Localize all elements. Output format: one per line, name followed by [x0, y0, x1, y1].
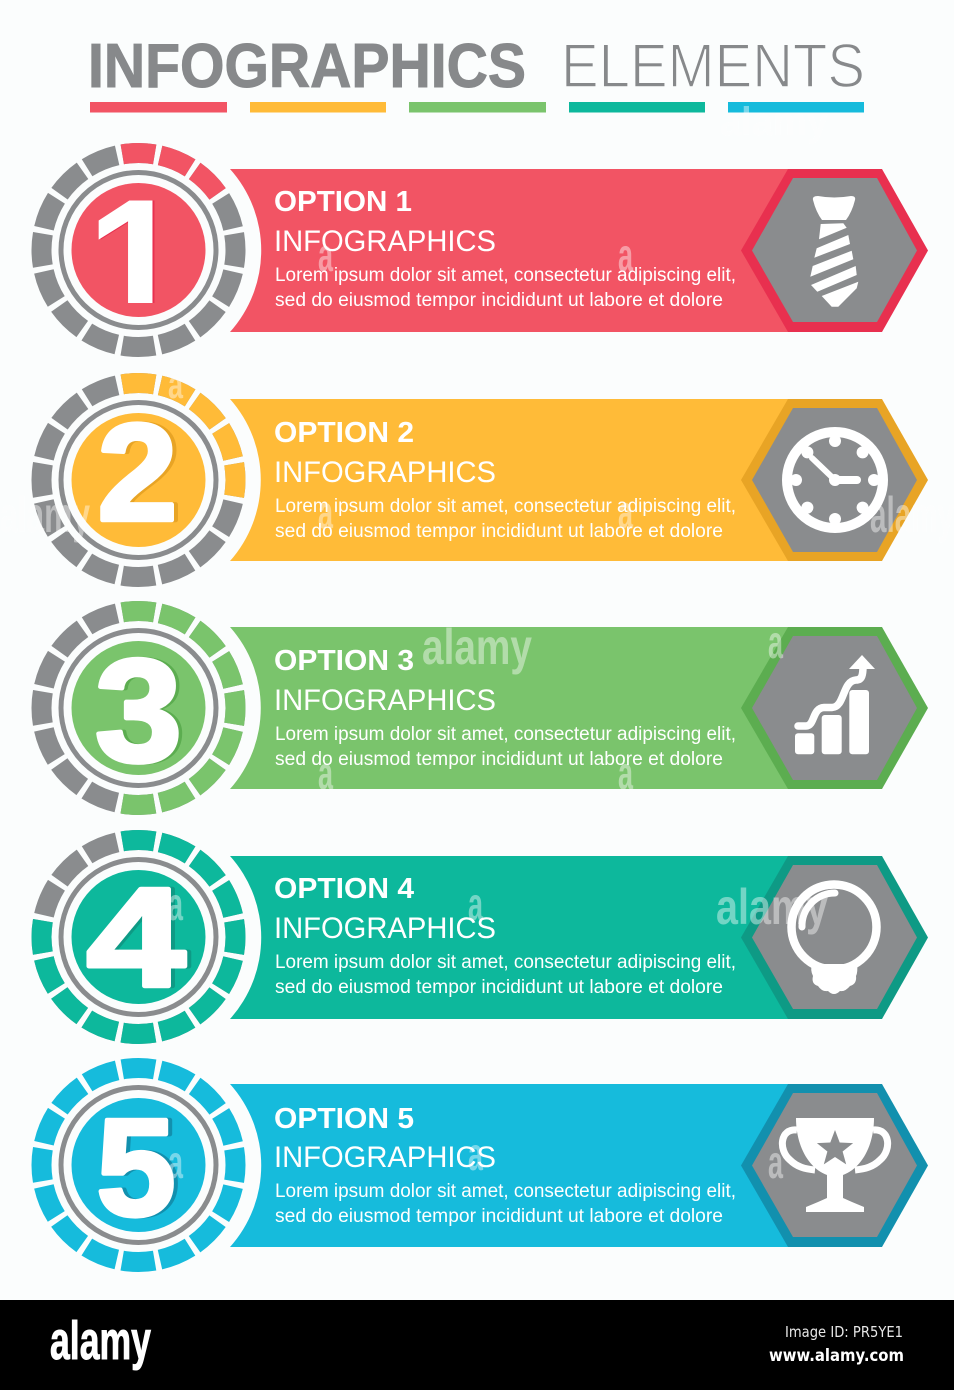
hexagon 3	[741, 627, 928, 789]
watermarks: a	[168, 878, 183, 930]
banner 5	[230, 1084, 800, 1247]
progress ring 2	[27, 368, 250, 592]
icon: clock	[787, 432, 883, 528]
title: ELEMENTS	[561, 32, 865, 101]
watermarks	[0, 100, 954, 1188]
panel: option 2	[27, 368, 928, 592]
panel: option 1	[27, 138, 928, 362]
icon: light bulb	[792, 884, 876, 994]
banner 1	[230, 169, 800, 332]
text: option 3: Lorem ipsum dolor sit amet, consectetur adipiscing elit,	[275, 724, 736, 745]
text: option 4: INFOGRAPHICS	[274, 912, 496, 945]
number disc 4	[72, 870, 206, 1004]
number 2: 2	[98, 396, 177, 549]
text: option 3: INFOGRAPHICS	[274, 684, 496, 717]
number 5: 5	[96, 1090, 176, 1245]
number 1	[98, 200, 154, 303]
text: option 5: INFOGRAPHICS	[274, 1141, 496, 1174]
banner 4	[230, 856, 800, 1019]
number 3: 3	[95, 630, 182, 793]
panel: option 3	[27, 596, 928, 820]
progress ring 5	[27, 1053, 250, 1277]
number disc 2	[72, 413, 206, 547]
number 1: 1	[86, 162, 186, 361]
website: www.alamy.com	[769, 1346, 904, 1365]
footer bar	[0, 1300, 954, 1390]
text: option 1: OPTION 1	[274, 186, 412, 218]
watermarks: a	[768, 616, 783, 668]
text: option 5	[274, 1103, 736, 1227]
text: option 4: Lorem ipsum dolor sit amet, consectetur adipiscing elit,	[275, 952, 736, 973]
text: option 5: sed do eiusmod tempor incididunt ut labore et dolore	[275, 1206, 723, 1227]
text: option 4: sed do eiusmod tempor incididunt ut labore et dolore	[275, 977, 723, 998]
number disc 1	[72, 183, 206, 317]
title	[88, 32, 865, 101]
watermarks: alamy	[0, 487, 90, 543]
icon: growth chart	[795, 655, 875, 754]
number 4: 4	[91, 859, 189, 1016]
number 3: 3	[99, 630, 185, 793]
text: option 5: OPTION 5	[274, 1103, 414, 1135]
text: option 1	[274, 186, 736, 311]
watermarks: a	[168, 1136, 183, 1188]
image id: Image ID: PR5YE1	[785, 1323, 903, 1341]
text: option 1: INFOGRAPHICS	[274, 225, 496, 258]
number 1: 1	[88, 162, 188, 361]
text: option 2: OPTION 2	[274, 417, 414, 449]
text: option 4: OPTION 4	[274, 873, 414, 905]
hexagon 2	[741, 399, 928, 561]
text: option 2	[274, 417, 736, 542]
number 2: 2	[102, 396, 181, 549]
watermarks: alamy	[422, 619, 532, 675]
text: option 2: INFOGRAPHICS	[274, 456, 496, 489]
watermarks: a	[618, 747, 633, 799]
text: option 3: OPTION 3	[274, 645, 414, 677]
watermarks: alamy	[720, 100, 829, 144]
text: option 3	[274, 645, 736, 770]
watermarks: a	[768, 1136, 783, 1188]
icon: trophy	[782, 1118, 888, 1212]
watermarks: a	[468, 1128, 483, 1180]
banner 3	[230, 627, 800, 789]
number disc 5	[72, 1098, 206, 1232]
text: option 5: Lorem ipsum dolor sit amet, consectetur adipiscing elit,	[275, 1181, 736, 1202]
hexagon 4	[741, 856, 928, 1019]
title: INFOGRAPHICS	[88, 32, 526, 101]
hexagon 1	[741, 169, 928, 332]
text: option 1: Lorem ipsum dolor sit amet, consectetur adipiscing elit,	[275, 265, 736, 286]
watermarks: a	[168, 363, 184, 407]
hexagon 5	[741, 1084, 928, 1247]
text: option 4	[274, 873, 736, 998]
footer logo: alamy	[50, 1311, 151, 1371]
watermarks: a	[468, 878, 483, 930]
watermarks: alamy	[716, 879, 828, 935]
panel: option 4	[27, 825, 928, 1049]
icon: necktie	[810, 196, 858, 307]
text: option 1: sed do eiusmod tempor incididunt ut labore et dolore	[275, 290, 723, 311]
number disc 3	[72, 641, 206, 775]
panel: option 5	[27, 1053, 928, 1277]
watermarks: a	[618, 486, 633, 538]
number 4: 4	[87, 859, 185, 1016]
colour underline bars	[90, 102, 864, 112]
progress ring 1	[27, 138, 250, 362]
text: option 3: sed do eiusmod tempor incididunt ut labore et dolore	[275, 749, 723, 770]
watermarks: a	[318, 747, 333, 799]
progress ring 3	[27, 596, 250, 820]
watermarks: a	[318, 229, 333, 281]
text: option 2: sed do eiusmod tempor incididunt ut labore et dolore	[275, 521, 723, 542]
number 5: 5	[100, 1090, 180, 1245]
text: option 2: Lorem ipsum dolor sit amet, consectetur adipiscing elit,	[275, 496, 736, 517]
progress ring 4	[27, 825, 250, 1049]
banner 2	[230, 399, 800, 561]
watermarks: a	[318, 486, 333, 538]
watermarks: a	[618, 229, 633, 281]
